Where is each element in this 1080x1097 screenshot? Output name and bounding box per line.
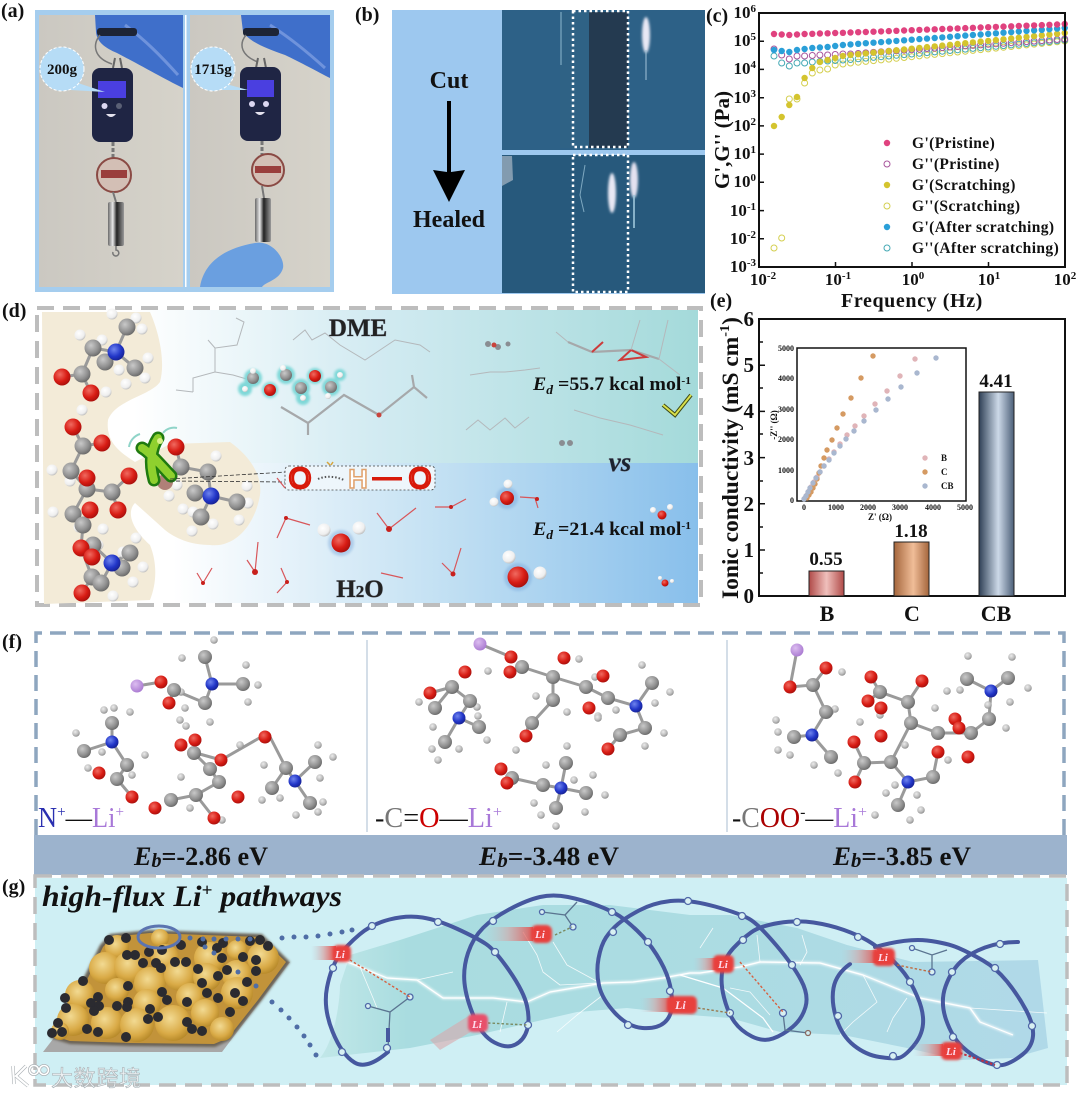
panel b: cut and healed film: [392, 10, 705, 294]
Li+ ion chips: Li: [877, 952, 889, 964]
x-axis ticks: -1: [842, 270, 851, 282]
inset Nyquist plot: C: [941, 467, 948, 477]
y-axis ticks: 5: [744, 353, 754, 377]
legend: G''(Pristine): [912, 156, 1000, 173]
label (g): (g): [2, 876, 25, 898]
binding energy band: [34, 835, 1067, 875]
bar B: 0.55: [809, 549, 843, 570]
y-axis ticks: 1: [750, 144, 756, 156]
y-axis ticks: 0: [750, 172, 756, 184]
inset Nyquist plot: 5000: [778, 344, 794, 353]
label (b): (b): [355, 4, 379, 26]
binding energy band: =-3.85 eV: [861, 842, 971, 871]
y-axis ticks: -1: [747, 201, 756, 213]
energy: DME: E: [532, 374, 546, 395]
bar B: [809, 549, 844, 596]
site label: COO-Li: +: [858, 804, 867, 821]
chart c: rheology frequency sweep: [710, 3, 1077, 312]
label (d): (d): [2, 300, 26, 322]
site label: COO-Li: —: [804, 803, 834, 834]
site label: N-Li: —: [65, 803, 93, 834]
energy: DME: =55.7 kcal mol: [553, 374, 681, 395]
y-axis ticks: 10: [734, 116, 750, 135]
bar C: [894, 521, 929, 596]
molecule: N+ site: [72, 636, 337, 824]
molecule: COO- site: [772, 644, 1032, 824]
versus mark: vs: [609, 447, 631, 477]
inset Nyquist plot: 5000: [957, 503, 973, 512]
x-axis ticks: 0: [919, 270, 925, 282]
panel a: weight-lifting photos: [35, 10, 334, 292]
helical chain: [326, 896, 1033, 1065]
inset Nyquist plot: 4000: [925, 503, 941, 512]
energy: water: -1: [681, 520, 691, 532]
binding energy band: E: [133, 842, 151, 871]
y-axis ticks: 2: [744, 492, 754, 516]
heading: H2O: H2O: [336, 576, 384, 603]
legend: G'(After scratching): [912, 219, 1054, 236]
photo: cut film: [502, 10, 705, 150]
legend: [884, 135, 1059, 257]
Li+ ion chips: Li: [945, 1046, 957, 1058]
icon: green microbe with signal arcs: [129, 428, 177, 480]
panel d: DME versus water desolvation: [37, 308, 701, 605]
y-axis ticks: 6: [744, 307, 754, 331]
y-axis ticks: 10: [734, 144, 750, 163]
zoom ring: [138, 926, 180, 948]
binding energy band: b: [151, 850, 162, 872]
site label: C=O-Li: -C=O—Li: [375, 803, 493, 834]
y-axis title: Ionic conductivity (mS cm: [718, 342, 743, 599]
glowing DME molecule: [238, 365, 346, 405]
Li+ ion chips: [311, 925, 962, 1060]
panel g: high-flux Li+ pathways: [35, 876, 1067, 1085]
bar CB: 4.41: [979, 371, 1013, 392]
binding energy band: E: [832, 842, 851, 871]
x-axis categories: [820, 601, 1012, 626]
inset Nyquist plot: 3000: [778, 405, 794, 414]
y-axis ticks: 6: [750, 3, 756, 15]
photo: healed film: [502, 155, 705, 293]
y-axis ticks: -2: [747, 229, 756, 241]
lightning bolts: [342, 928, 1047, 1035]
title: pathways: [212, 880, 342, 913]
Li+ dashed coordination links: [350, 927, 995, 1065]
y-axis title: ): [718, 317, 743, 325]
hydrogen bond O-H-O callout: H: [348, 464, 368, 494]
data series: [774, 24, 1065, 248]
label (c): (c): [706, 5, 728, 27]
site label: COO-Li: -: [800, 804, 805, 821]
energy: water: =21.4 kcal mol: [553, 519, 681, 540]
legend: G'(Pristine): [912, 135, 995, 152]
y-axis ticks: 1: [744, 538, 754, 562]
x-axis categories: B: [820, 601, 835, 626]
carboxyl side groups: [366, 902, 947, 1048]
hydrogen bond O-H-O callout: O: [289, 463, 311, 495]
energy: DME: d: [546, 382, 554, 397]
site label: N-Li: Li: [92, 803, 116, 834]
callout: 1715g: [191, 47, 248, 91]
y-axis ticks: [744, 307, 754, 608]
binding energy band: =-3.48 eV: [508, 842, 619, 871]
stick molecules: DME: [176, 318, 680, 446]
legend: G''(After scratching): [912, 240, 1059, 257]
inset Nyquist plot: 3000: [892, 503, 908, 512]
energy: DME: -1: [681, 375, 691, 387]
heading: DME: DME: [329, 315, 387, 342]
dashed selection boxes: [573, 11, 628, 147]
y-axis title: -1: [718, 325, 733, 337]
x-axis ticks: 10: [825, 270, 842, 289]
inset Nyquist plot: 1000: [828, 503, 844, 512]
site label: COO-Li: -COO: [732, 803, 800, 834]
x-axis ticks: -2: [767, 270, 777, 282]
inset Nyquist plot: 2000: [860, 503, 876, 512]
Li+ ion chips: Li: [471, 1019, 483, 1031]
hydrogen bond O-H-O callout: [285, 462, 435, 495]
y-axis ticks: 0: [744, 584, 754, 608]
y-axis ticks: 3: [744, 446, 754, 470]
inset Nyquist plot: 0: [802, 503, 806, 512]
binding energy band: E: [478, 842, 497, 871]
inset Nyquist plot: Z' (Ω): [868, 512, 892, 522]
polymer chain atoms: [46, 308, 254, 602]
site label: N-Li: +: [115, 804, 124, 821]
y-axis ticks: 10: [734, 3, 750, 22]
inset Nyquist plot: B: [941, 453, 947, 463]
energy: water: d: [546, 527, 554, 542]
heading: Cut: Cut: [430, 68, 468, 94]
x-axis ticks: 10: [902, 270, 919, 289]
label (f): (f): [2, 631, 22, 653]
watermark: 大数跨境: [51, 1066, 141, 1091]
dashed frame: [36, 633, 1064, 835]
callout: 200g: 200g: [47, 62, 78, 78]
y-axis ticks: 10: [734, 172, 750, 191]
label (e): (e): [710, 290, 732, 312]
legend: G''(Scratching): [912, 198, 1020, 215]
binding energy band: =-2.86 eV: [162, 842, 268, 871]
x-axis ticks: 2: [1071, 270, 1077, 282]
watermark: [13, 1066, 141, 1091]
inset Nyquist plot: 4000: [778, 374, 794, 383]
binding energy band: b: [497, 850, 508, 872]
site label: COO-Li: Li: [833, 803, 858, 834]
site label: C=O-Li: +: [493, 804, 502, 821]
Li+ ion chips: Li: [717, 959, 729, 971]
x-axis categories: C: [904, 601, 920, 626]
heading: Healed: Healed: [413, 207, 486, 233]
site label: N-Li: +: [57, 804, 66, 821]
x-axis ticks: 10: [1054, 270, 1071, 289]
callout: 1715g: 1715g: [194, 62, 232, 78]
inset Nyquist plot: [769, 344, 973, 522]
bar C: 1.18: [894, 521, 928, 542]
title: high-flux Li: [42, 880, 193, 913]
x-axis ticks: 10: [978, 270, 995, 289]
y-axis ticks: 10: [734, 59, 750, 78]
Li+ ion chips: Li: [334, 949, 346, 961]
x-axis title: Frequency (Hz): [841, 290, 983, 312]
site label: N-Li: N: [38, 803, 57, 834]
inset Nyquist plot: -Z'' (Ω): [769, 410, 779, 440]
dashed frame: [37, 308, 701, 605]
porous sponge particle: [43, 926, 290, 1052]
y-axis ticks: 2: [750, 116, 756, 128]
water molecules: [197, 478, 674, 593]
x-axis categories: CB: [981, 601, 1012, 626]
x-axis ticks: [750, 270, 1077, 289]
teal ribbon: [320, 905, 1048, 1060]
y-axis ticks: 4: [744, 399, 754, 423]
y-axis ticks: -3: [747, 257, 756, 269]
legend: G'(Scratching): [912, 177, 1016, 194]
inset Nyquist plot: 1000: [778, 466, 794, 475]
y-axis ticks: 5: [750, 31, 756, 43]
title: +: [202, 880, 212, 900]
y-axis ticks: 3: [750, 88, 756, 100]
inset Nyquist plot: CB: [941, 481, 954, 491]
y-axis ticks: 4: [750, 59, 756, 71]
y-axis ticks: 10: [734, 31, 750, 50]
dotted zoom lines: [188, 928, 354, 1058]
binding energy band: b: [851, 850, 861, 872]
polymer blob background: [42, 312, 260, 604]
Li+ ion chips: Li: [674, 998, 686, 1012]
inset Nyquist plot: 2000: [778, 435, 794, 444]
y-axis ticks: 10: [730, 201, 747, 220]
photo: 200 g load: [39, 15, 183, 287]
y-axis title: G',G'' (Pa): [710, 91, 734, 189]
y-axis ticks: [730, 3, 756, 276]
x-axis ticks: 10: [750, 270, 767, 289]
dashed frame: [35, 876, 1067, 1085]
ring nodes on chain: [330, 898, 1036, 1068]
label (a): (a): [1, 0, 24, 22]
bar CB: [979, 371, 1014, 596]
photo: 1715 g load: [190, 15, 330, 287]
chart e: ionic conductivity bars with Nyquist inset: [718, 307, 1065, 626]
x-axis ticks: 1: [995, 270, 1000, 282]
panel f: Li binding sites: [34, 633, 1067, 875]
dashed link lines: [170, 472, 286, 482]
arrow: cut to healed: [433, 101, 465, 202]
y-axis ticks: 10: [730, 257, 747, 276]
icon: check mark: [663, 395, 691, 415]
y-axis ticks: 10: [730, 229, 747, 248]
Li+ ion chips: Li: [534, 929, 546, 941]
molecule: C=O site: [415, 638, 674, 830]
y-axis ticks: 10: [734, 88, 750, 107]
inset Nyquist plot: 0: [790, 496, 794, 505]
callout: 200g: [40, 47, 105, 92]
hydrogen bond O-H-O callout: O: [409, 463, 431, 495]
energy: water: E: [532, 519, 546, 540]
